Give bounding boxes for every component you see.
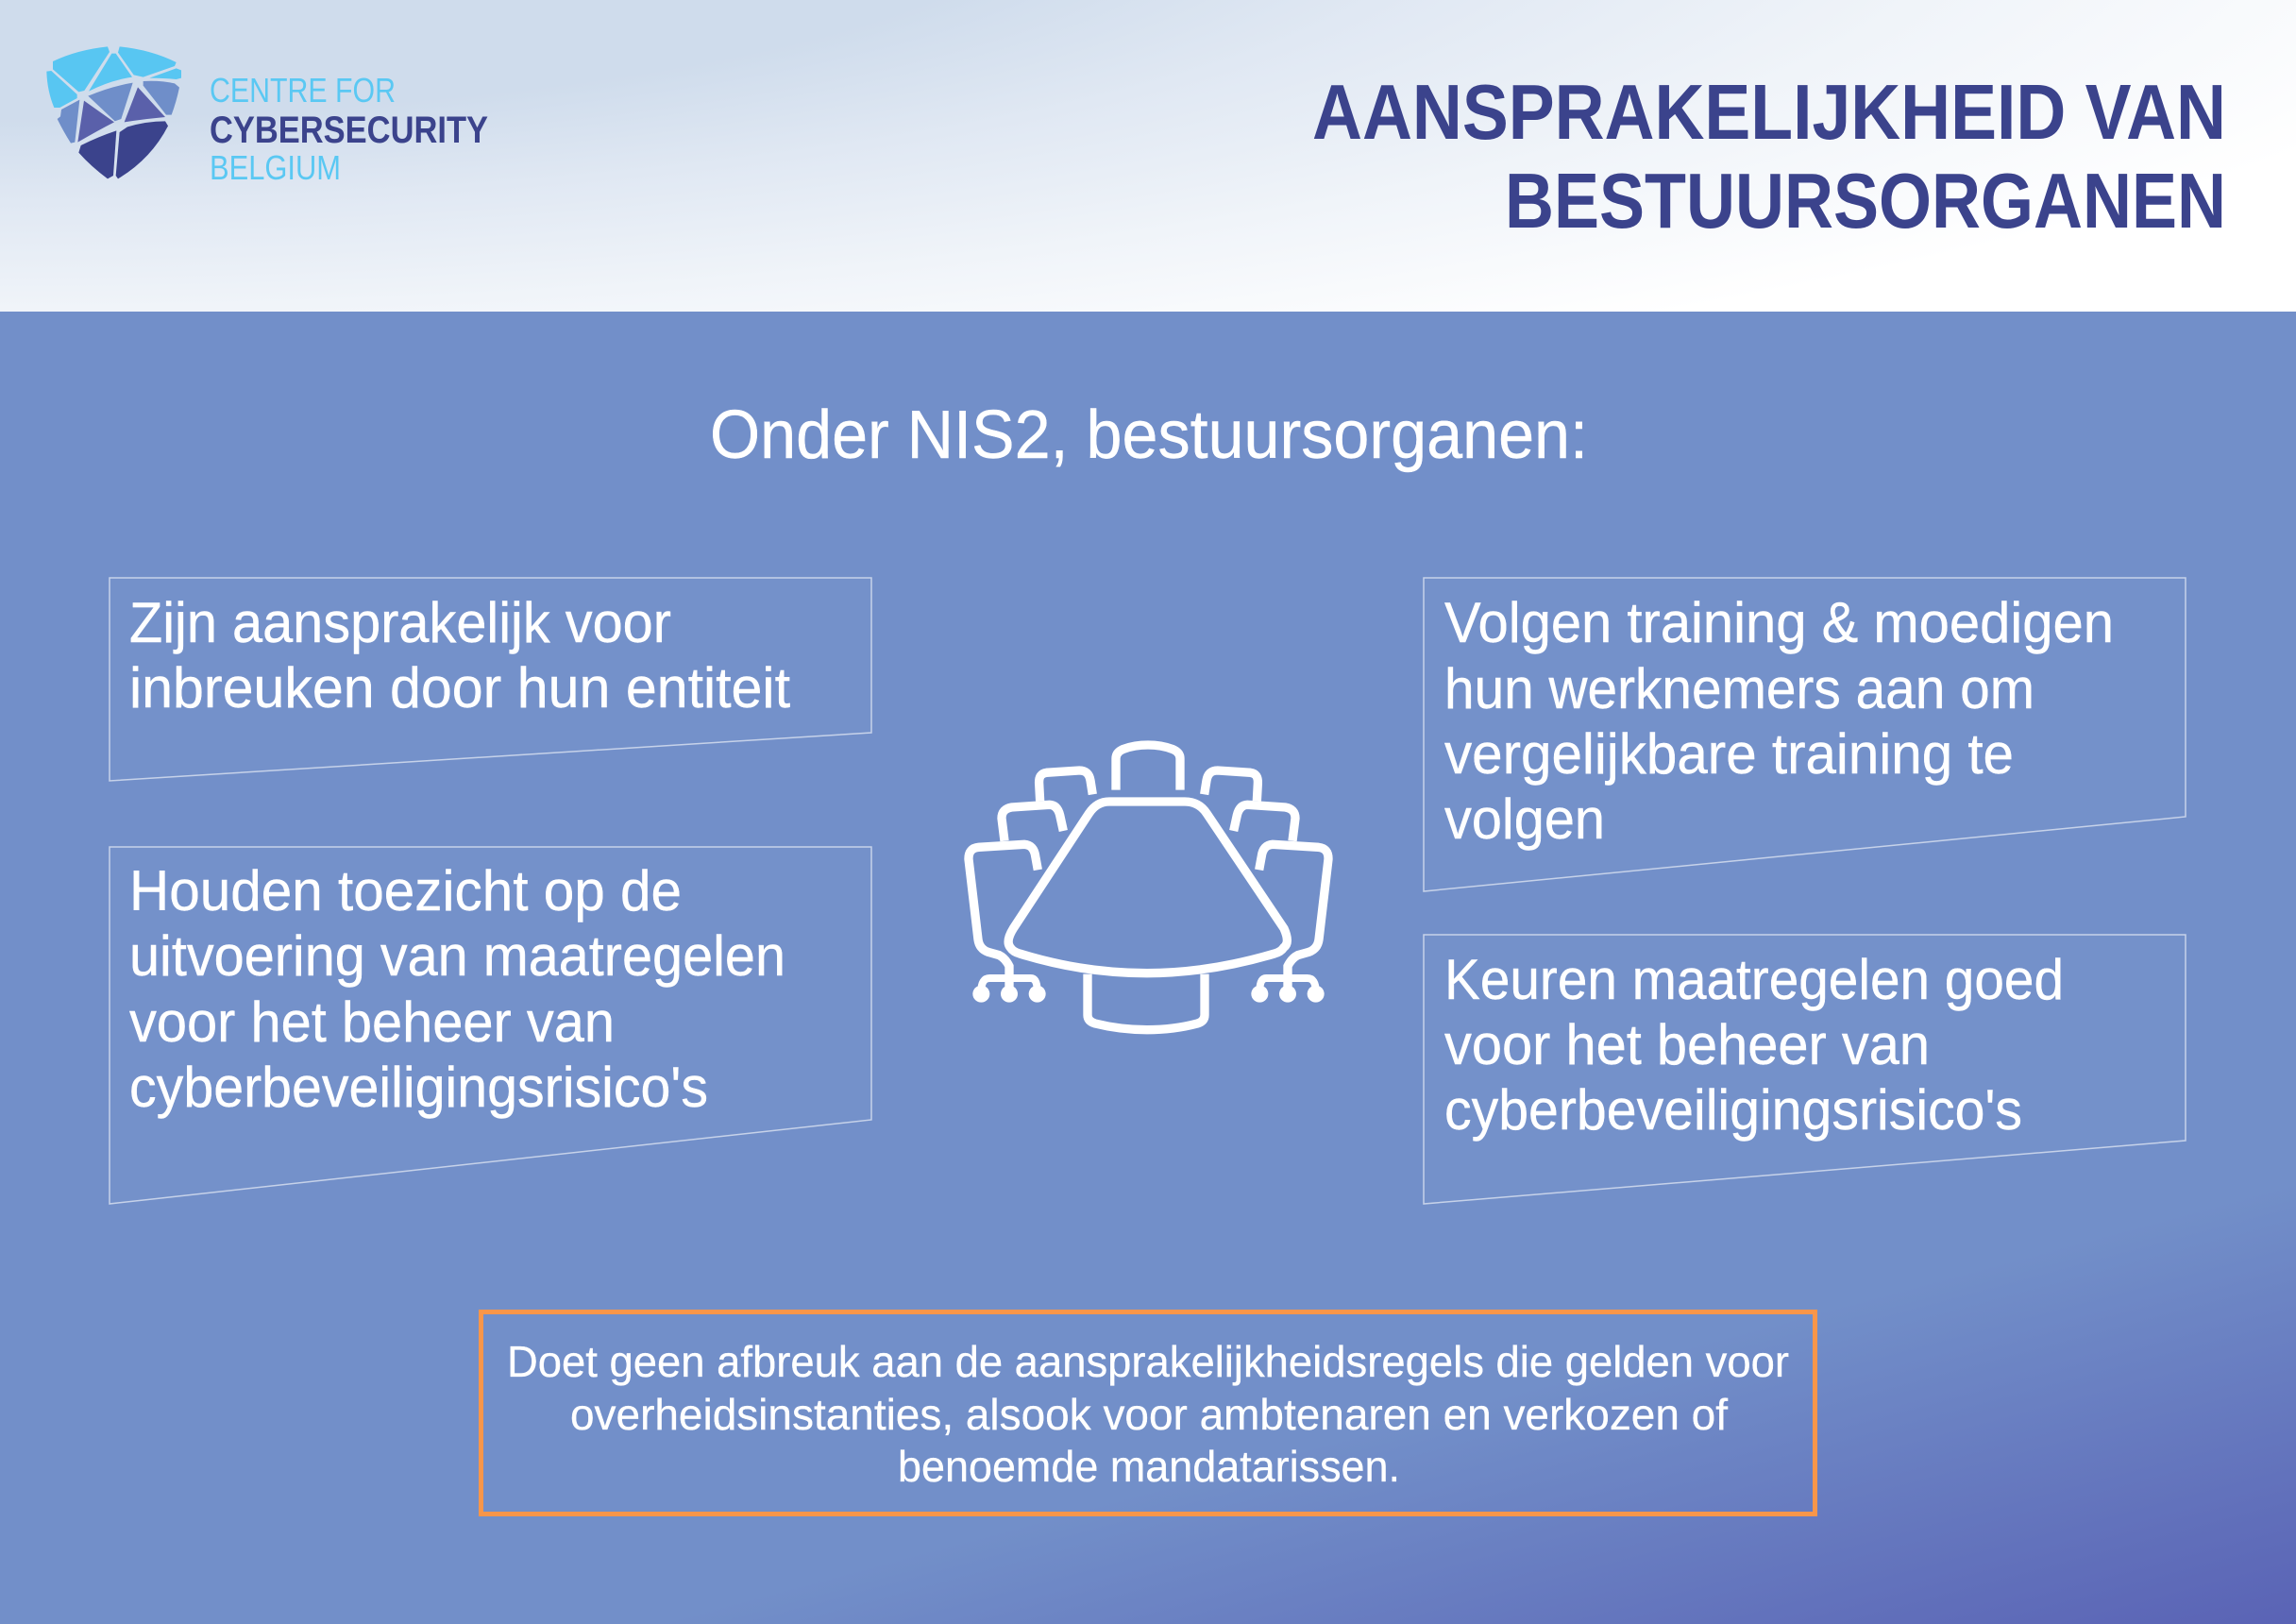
title — [1312, 68, 2226, 245]
callout: orange note: Doet geen afbreuk aan de aansprakelijkheidsregels die gelden voor — [507, 1337, 1789, 1386]
panel: toezicht — [110, 847, 871, 1204]
icon: shield — [46, 46, 181, 178]
panel: maatregelen goedkeuren: cyberbeveiligingsrisico's — [1444, 1078, 2022, 1142]
panel: training — [1424, 578, 2186, 891]
logo wordmark: BELGIUM — [210, 148, 341, 187]
logo wordmark: CYBERSECURITY — [210, 110, 488, 151]
panel: aansprakelijk: Zijn aansprakelijk voor — [129, 591, 671, 654]
panel: toezicht: Houden toezicht op de — [129, 859, 682, 922]
panel: toezicht: uitvoering van maatregelen — [129, 924, 785, 988]
panel: aansprakelijk — [110, 578, 871, 781]
panel: training: hun werknemers aan om — [1444, 657, 2034, 720]
logo wordmark — [210, 71, 488, 187]
subtitle: Onder NIS2, bestuursorganen: — [710, 398, 1588, 473]
logo wordmark: CENTRE FOR — [210, 71, 396, 110]
callout: orange note: overheidsinstanties, alsook voor ambtenaren en verkozen of — [570, 1390, 1728, 1439]
panel: toezicht: voor het beheer van — [129, 990, 615, 1054]
panel: training: Volgen training & moedigen — [1444, 591, 2114, 654]
panel: training: volgen — [1444, 787, 1605, 851]
panel: maatregelen goedkeuren — [1424, 935, 2186, 1204]
header gradient band — [0, 0, 2296, 312]
callout: orange note: benoemde mandatarissen. — [898, 1442, 1400, 1491]
panel: maatregelen goedkeuren: Keuren maatregelen goed — [1444, 948, 2064, 1011]
icon: boardroom table with chairs — [969, 745, 1328, 1030]
panel: training: vergelijkbare training te — [1444, 722, 2014, 786]
panel: toezicht: cyberbeveiligingsrisico's — [129, 1056, 708, 1119]
panel: maatregelen goedkeuren: voor het beheer van — [1444, 1013, 1930, 1076]
logo: Centre for Cybersecurity Belgium — [46, 46, 488, 187]
panel: aansprakelijk: inbreuken door hun entiteit — [129, 656, 790, 719]
callout: orange note — [481, 1312, 1815, 1514]
